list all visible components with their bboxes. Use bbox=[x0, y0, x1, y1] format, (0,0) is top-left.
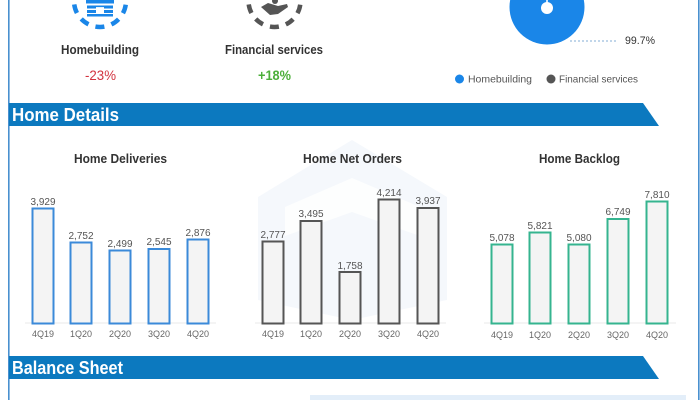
pie legend: Financial services bbox=[559, 74, 638, 86]
bar chart: Home Backlog: 6,749 bbox=[605, 207, 631, 218]
bar chart: Home Deliveries: 2,876 bbox=[185, 228, 211, 239]
pie chart: revenue share bbox=[510, 0, 655, 47]
bar chart: Home Net Orders: 4,214 bbox=[376, 188, 402, 199]
balance sheet panel top edge bbox=[310, 395, 686, 400]
icon: financial services bbox=[248, 0, 300, 27]
value: financial services change: +18% bbox=[258, 68, 291, 83]
bar chart: Home Backlog: 5,078 bbox=[489, 233, 515, 244]
section header: Home Details: Home Details bbox=[12, 105, 119, 125]
bar chart: Home Net Orders: 4Q20 bbox=[417, 329, 439, 339]
pie legend: Homebuilding bbox=[468, 74, 532, 86]
bar chart: Home Deliveries bbox=[25, 152, 216, 339]
bar chart: Home Net Orders: 1Q20 bbox=[300, 329, 322, 339]
bar chart: Home Backlog: 3Q20 bbox=[607, 330, 629, 340]
section header: Home Details bbox=[9, 103, 659, 126]
bar chart: Home Net Orders: 2,777 bbox=[260, 230, 286, 241]
watermark: house chevrons bbox=[258, 140, 447, 320]
bar chart: Home Deliveries: 4Q19 bbox=[32, 329, 54, 339]
bar chart: Home Net Orders bbox=[255, 152, 446, 339]
bar chart: Home Deliveries: 1Q20 bbox=[70, 329, 92, 339]
bar chart: Home Deliveries: Home Deliveries bbox=[74, 152, 167, 166]
bar chart: Home Deliveries: 4Q20 bbox=[187, 329, 209, 339]
bar chart: Home Net Orders: 4Q19 bbox=[262, 329, 284, 339]
bar chart: Home Backlog: 4Q19 bbox=[491, 330, 513, 340]
value: homebuilding change: -23% bbox=[85, 68, 116, 83]
bar chart: Home Backlog bbox=[484, 152, 676, 340]
bar chart: Home Deliveries: 3Q20 bbox=[148, 329, 170, 339]
bar chart: Home Deliveries: 2,752 bbox=[68, 231, 94, 242]
label: Homebuilding: Homebuilding bbox=[61, 43, 139, 57]
bar chart: Home Net Orders: 2Q20 bbox=[339, 329, 361, 339]
bar chart: Home Backlog: 7,810 bbox=[644, 190, 670, 201]
bar chart: Home Backlog: 5,080 bbox=[566, 233, 592, 244]
section header: Balance Sheet: Balance Sheet bbox=[12, 358, 123, 378]
pie legend bbox=[455, 74, 638, 86]
bar chart: Home Net Orders: Home Net Orders bbox=[303, 152, 402, 166]
bar chart: Home Deliveries: 2,545 bbox=[146, 237, 172, 248]
bar chart: Home Backlog: 5,821 bbox=[527, 221, 553, 232]
bar chart: Home Net Orders: 3,937 bbox=[415, 196, 441, 207]
icon: homebuilding bbox=[74, 0, 126, 27]
bar chart: Home Net Orders: 3,495 bbox=[298, 209, 324, 220]
bar chart: Home Backlog: 2Q20 bbox=[568, 330, 590, 340]
pie chart: revenue share: 99.7% bbox=[625, 35, 655, 47]
bar chart: Home Net Orders: 1,758 bbox=[337, 261, 363, 272]
bar chart: Home Backlog: Home Backlog bbox=[539, 152, 620, 166]
bar chart: Home Backlog: 4Q20 bbox=[646, 330, 668, 340]
bar chart: Home Deliveries: 3,929 bbox=[30, 197, 56, 208]
section header: Balance Sheet bbox=[9, 356, 659, 379]
bar chart: Home Deliveries: 2Q20 bbox=[109, 329, 131, 339]
bar chart: Home Backlog: 1Q20 bbox=[529, 330, 551, 340]
bar chart: Home Net Orders: 3Q20 bbox=[378, 329, 400, 339]
label: Financial services: Financial services bbox=[225, 43, 323, 57]
bar chart: Home Deliveries: 2,499 bbox=[107, 239, 133, 250]
